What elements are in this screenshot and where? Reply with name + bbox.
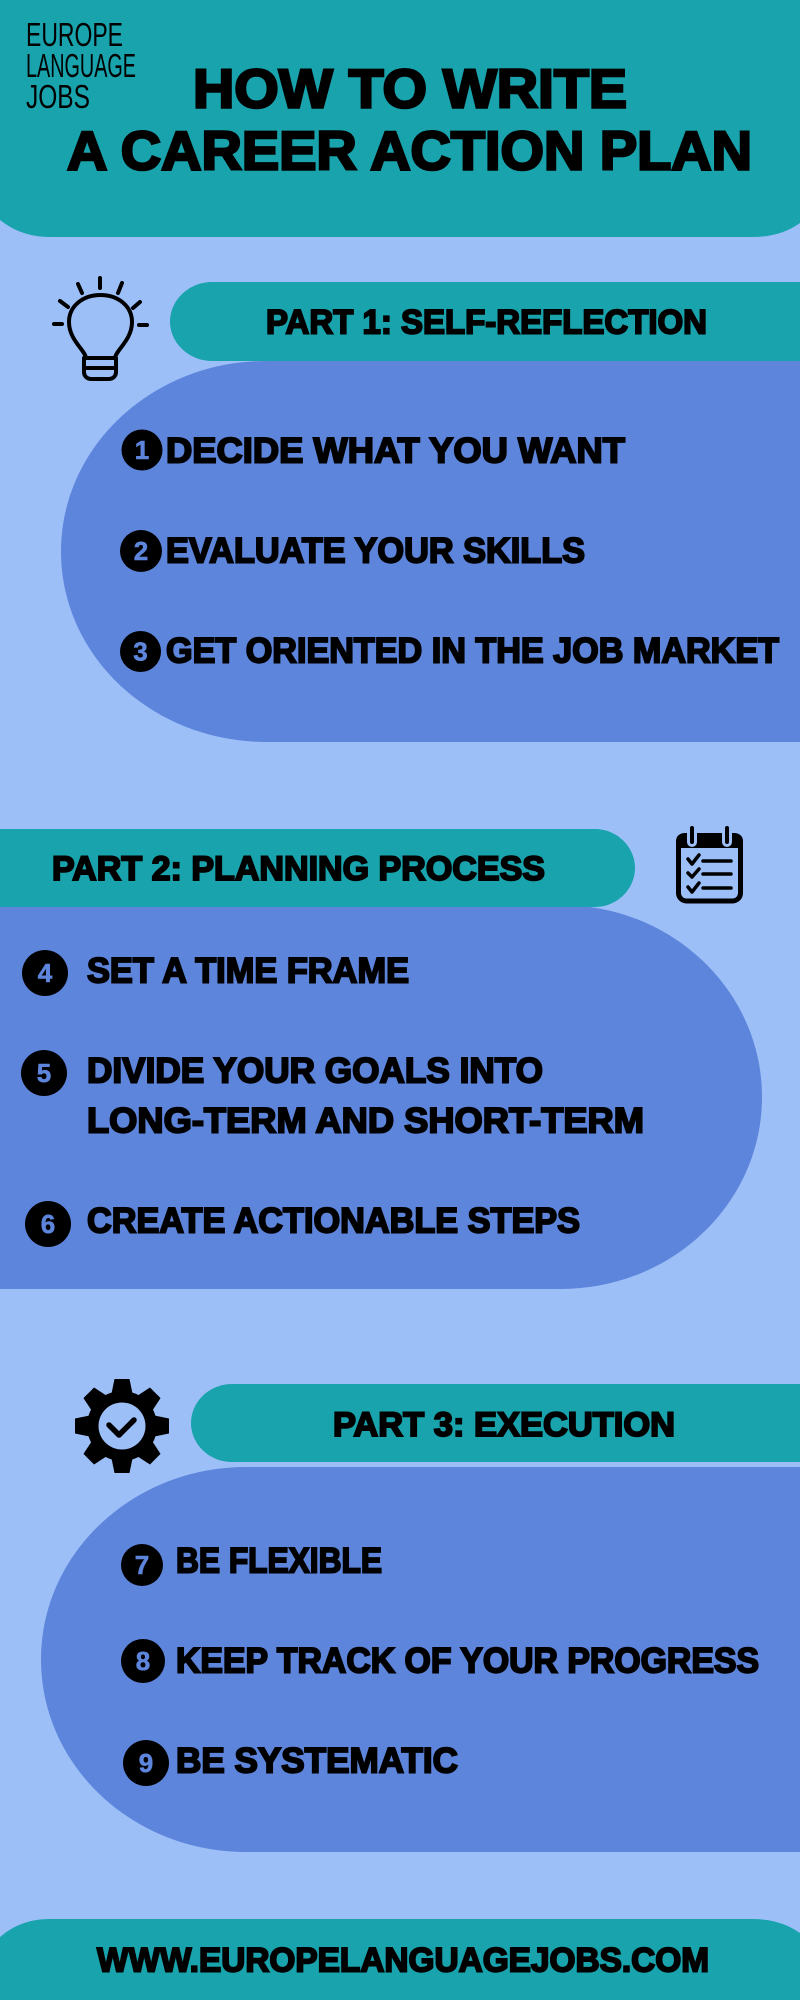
step 7 [121, 1542, 382, 1586]
step 5: DIVIDE YOUR GOALS INTO [87, 1052, 543, 1090]
heading pill: part 2 [0, 829, 635, 907]
step 6: 6 [41, 1209, 55, 1239]
panel: part 3 steps [41, 1467, 800, 1852]
logo: Europe Language Jobs: EUROPE [26, 16, 123, 53]
step 7: 7 [135, 1550, 149, 1580]
step 2: 2 [134, 536, 148, 566]
icon: gear with check [75, 1379, 169, 1473]
logo: Europe Language Jobs: LANGUAGE [26, 47, 136, 84]
logo: Europe Language Jobs: JOBS [26, 78, 90, 115]
step 4 [22, 950, 409, 996]
heading pill: part 1: PART 1: SELF-REFLECTION [266, 304, 707, 342]
step 7: BE FLEXIBLE [176, 1542, 382, 1580]
step 5: 5 [37, 1058, 51, 1088]
title: HOW TO WRITE [193, 58, 627, 120]
step 5: LONG-TERM AND SHORT-TERM [87, 1102, 644, 1140]
step 5 [21, 1050, 644, 1140]
heading pill: part 1 [170, 282, 800, 361]
panel: part 1 steps [61, 361, 800, 742]
step 3: GET ORIENTED IN THE JOB MARKET [166, 632, 779, 670]
logo: Europe Language Jobs [26, 16, 136, 115]
heading pill: part 3 [191, 1384, 800, 1462]
step 4: 4 [38, 958, 53, 988]
step 1: DECIDE WHAT YOU WANT [166, 432, 625, 470]
step 9: BE SYSTEMATIC [176, 1742, 458, 1780]
step 9: 9 [139, 1748, 153, 1778]
footer banner [0, 1919, 800, 2000]
step 6: CREATE ACTIONABLE STEPS [87, 1202, 580, 1240]
icon: light bulb [54, 278, 147, 379]
step 4: SET A TIME FRAME [87, 952, 409, 990]
title [67, 58, 752, 182]
heading pill: part 3: PART 3: EXECUTION [333, 1406, 675, 1444]
header banner [0, 0, 800, 237]
step 1: 1 [135, 435, 149, 465]
title: A CAREER ACTION PLAN [67, 120, 752, 182]
step 2: EVALUATE YOUR SKILLS [166, 532, 585, 570]
step 3: 3 [133, 636, 148, 666]
step 8: 8 [136, 1646, 150, 1676]
panel: part 2 steps [0, 905, 762, 1289]
step 8: KEEP TRACK OF YOUR PROGRESS [176, 1642, 759, 1680]
footer banner: WWW.EUROPELANGUAGEJOBS.COM [97, 1942, 709, 1980]
icon: calendar checklist [676, 828, 743, 901]
heading pill: part 2: PART 2: PLANNING PROCESS [52, 850, 545, 888]
